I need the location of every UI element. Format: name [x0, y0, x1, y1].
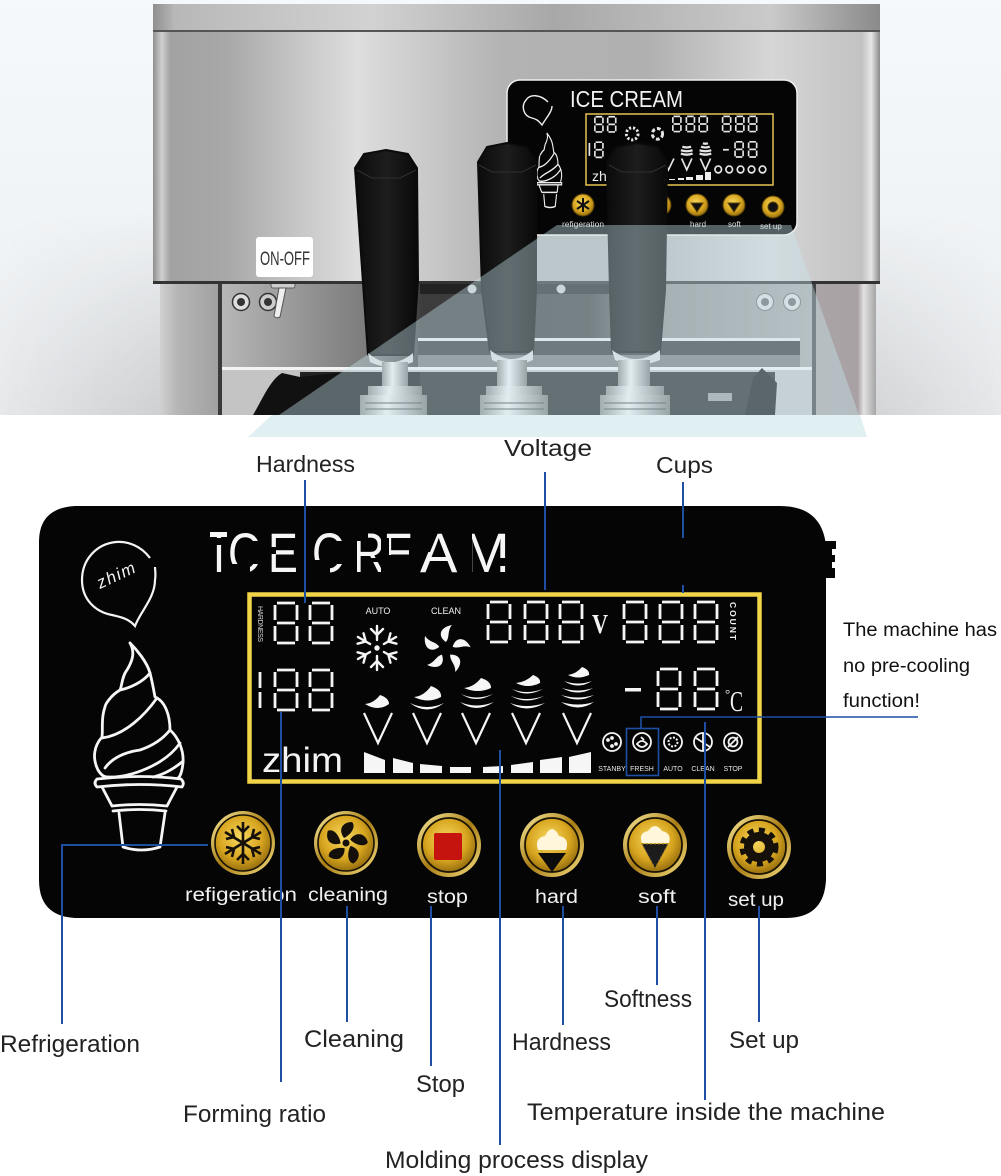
unit V: V [592, 609, 608, 639]
panel title: A [420, 521, 458, 584]
status labels: CLEAN [691, 766, 715, 773]
LCD display frame [250, 594, 760, 782]
main control panel [39, 506, 836, 918]
panel title [208, 521, 514, 584]
cleaning button [314, 811, 378, 875]
label: Hardness bottom: Hardness [512, 1029, 611, 1056]
label: Temperature inside the machine: Temperature inside the machine [527, 1099, 885, 1126]
LCD brand: zhim [262, 741, 343, 780]
note: no pre-cooling [843, 620, 997, 712]
small control panel on machine [507, 80, 797, 235]
molding progress bars [364, 752, 591, 773]
status labels: AUTO [663, 766, 683, 773]
ON-OFF sticker [256, 237, 313, 277]
small display: zhi [592, 168, 610, 184]
AUTO label: AUTO [366, 606, 390, 616]
machine photo background [0, 0, 1001, 415]
stop leader [430, 906, 432, 1066]
molding process leader [499, 750, 501, 1145]
dark knobs on the base [253, 368, 777, 415]
COUNT vertical label: COUNT [728, 602, 738, 641]
button labels: soft [638, 887, 677, 908]
handle 2 [478, 143, 548, 415]
panel side notches [824, 541, 836, 578]
cups digits [624, 602, 717, 642]
refrigeration leader [62, 845, 208, 1024]
handle 1 [355, 150, 427, 415]
status labels: STANBY [598, 766, 626, 773]
label: Softness: Softness [604, 986, 692, 1013]
unit degrees C: ° [725, 686, 730, 701]
machine head [153, 4, 880, 284]
screws and toggle switch [232, 283, 800, 318]
translucent zoom beam [248, 225, 867, 437]
set up leader [758, 906, 760, 1022]
set up button [727, 815, 791, 879]
speech bubble logo: zhim [93, 558, 140, 593]
machine base [160, 283, 876, 415]
small button labels: set up [760, 222, 782, 231]
label: Refrigeration: Refrigeration [0, 1031, 140, 1058]
ice cream cone outline [95, 643, 183, 850]
LCD fan icon [422, 625, 471, 672]
label: Hardness: Hardness [256, 451, 355, 477]
handle 3 [600, 143, 670, 415]
soft button [623, 813, 687, 877]
molding process cones [365, 667, 594, 710]
blue leader lines [62, 472, 918, 1145]
pre-cooling leader [641, 717, 918, 728]
dispensing handles [355, 143, 670, 415]
label: Cups: Cups [656, 452, 713, 478]
status labels: FRESH [630, 766, 654, 773]
softness leader [656, 906, 658, 985]
refrigeration button [211, 811, 275, 875]
status labels [598, 766, 743, 773]
voltage leader [544, 472, 546, 590]
label: Stop: Stop [416, 1071, 465, 1098]
unit degrees C [725, 686, 743, 718]
forming ratio leader [280, 712, 282, 1082]
small buttons [572, 194, 784, 218]
ON-OFF sticker: ON-OFF [260, 249, 310, 270]
stop button [417, 813, 481, 877]
hardness digits [275, 603, 332, 643]
CLEAN label: CLEAN [431, 606, 461, 616]
button labels: stop [427, 887, 468, 908]
status icons [603, 733, 742, 751]
small display [586, 114, 773, 185]
button labels: refigeration [185, 885, 297, 906]
label: Forming ratio: Forming ratio [183, 1101, 326, 1128]
note: no pre-cooling: function! [843, 691, 920, 712]
panel title: ICE CRE [213, 521, 413, 584]
cone V shapes [364, 713, 591, 743]
button labels: set up [728, 890, 784, 911]
small button labels: hard [690, 220, 706, 229]
label: Cleaning: Cleaning [304, 1026, 404, 1053]
temperature digits [658, 669, 717, 709]
small panel title: ICE CREAM [570, 86, 683, 112]
note: no pre-cooling: no pre-cooling [843, 656, 970, 677]
voltage digits [488, 602, 582, 642]
small speech bubble and cone [523, 96, 562, 208]
hardness button leader [562, 906, 564, 1025]
button labels [185, 885, 784, 911]
button labels: hard [535, 887, 578, 908]
label: Set up: Set up [729, 1027, 799, 1054]
status labels: STOP [724, 766, 743, 773]
hard button [520, 813, 584, 877]
small button labels: refigeration [562, 220, 604, 229]
cups leader [682, 482, 684, 593]
LCD snowflake icon [355, 626, 399, 670]
temperature leader [704, 722, 706, 1100]
label: Voltage: Voltage [504, 435, 592, 461]
minus sign [625, 688, 641, 692]
fresh highlight box [626, 728, 658, 776]
LCD seven segment digits [260, 602, 717, 710]
small button labels [562, 220, 782, 231]
unit degrees C: C [730, 686, 743, 718]
small button labels: soft [728, 220, 742, 229]
note: no pre-cooling: The machine has [843, 620, 997, 641]
speech bubble logo [82, 542, 155, 626]
button labels: cleaning [308, 885, 388, 906]
hardness vertical label: HARDNESS [256, 606, 263, 642]
hardness leader [304, 480, 306, 603]
forming ratio digits [260, 670, 332, 710]
panel title: M [463, 521, 510, 584]
label: Molding process display: Molding process display [385, 1147, 648, 1174]
cleaning leader [346, 906, 348, 1022]
